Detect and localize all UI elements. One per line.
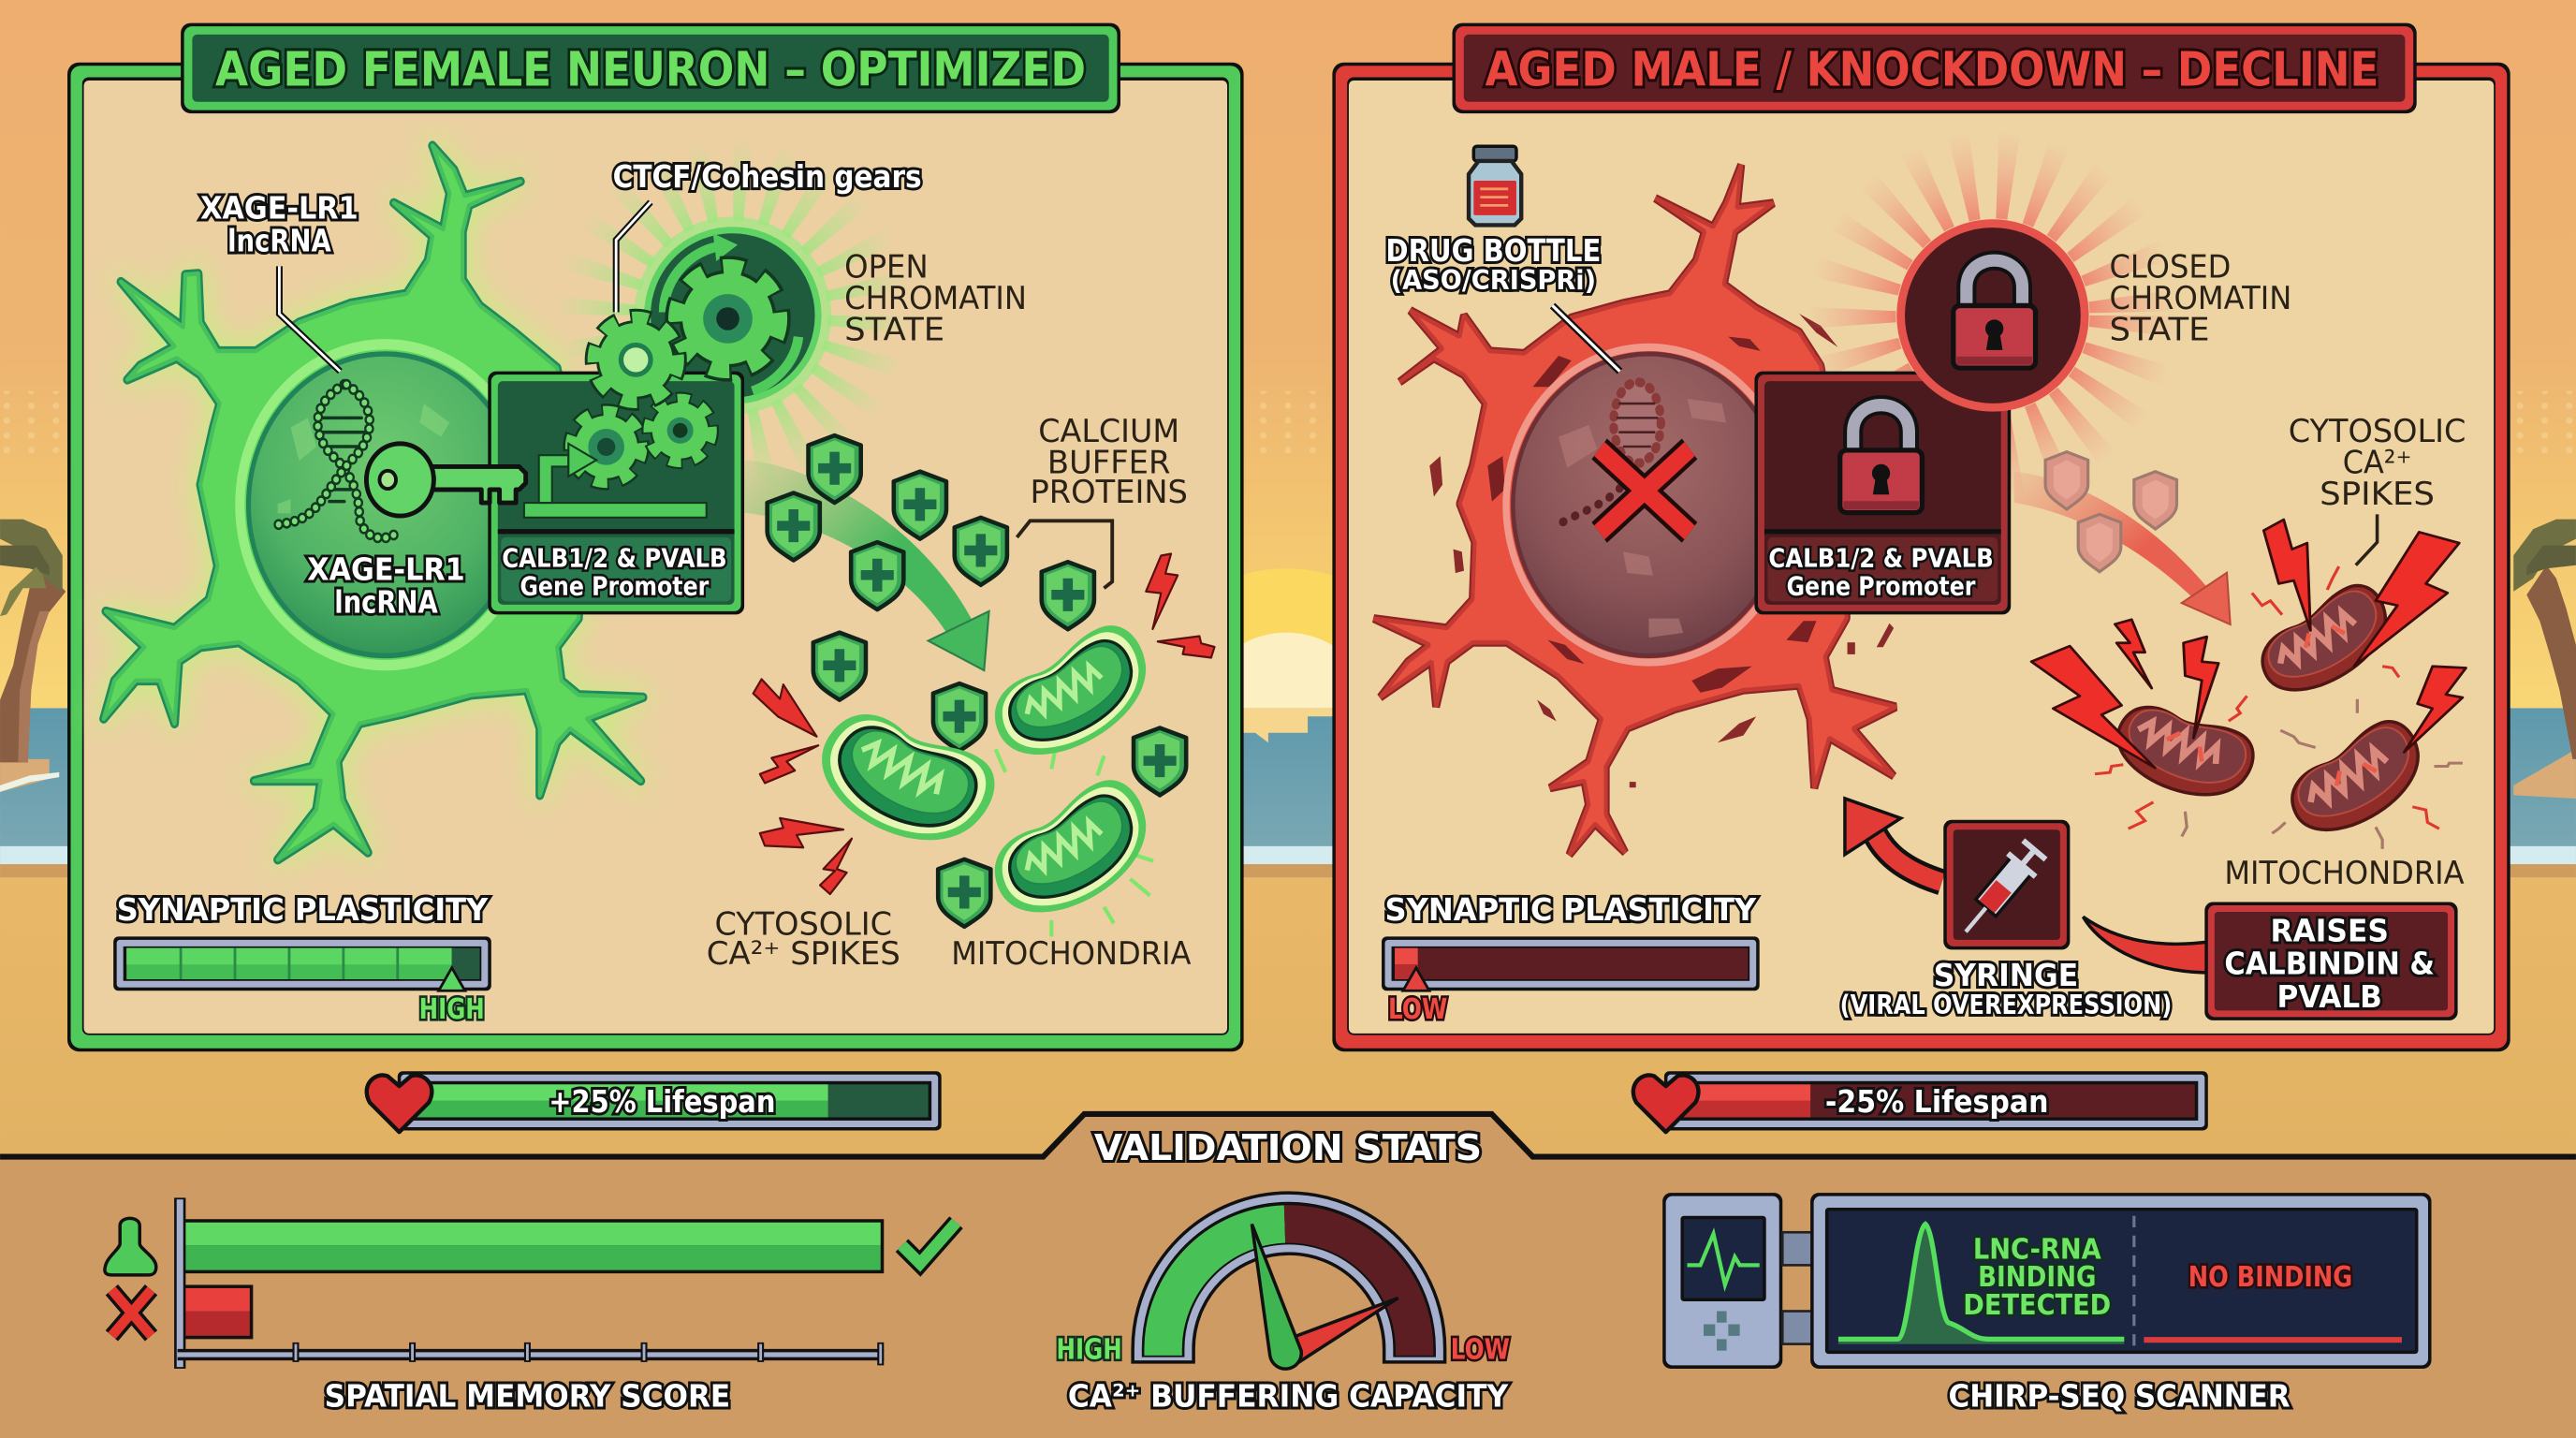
label: cytosolic spikes: CYTOSOLIC (714, 906, 892, 944)
icon: dna helix (273, 385, 394, 538)
label: XAGE-LR1 lncRNA top: XAGE-LR1 (200, 189, 359, 226)
closed chromatin rays (1852, 174, 2134, 457)
connectors (1782, 1232, 1812, 1344)
label: closed chromatin state (2110, 249, 2291, 348)
gauge needle green (1251, 1224, 1301, 1369)
palm tree left (0, 520, 66, 792)
icon: person (105, 1218, 156, 1275)
promoter label: Gene Promoter (1787, 572, 1976, 601)
scanner screen: NO BINDING (2188, 1261, 2352, 1294)
heading: VALIDATION STATS (1094, 1127, 1482, 1169)
callout: raises calbindin: CALBINDIN & (2224, 946, 2435, 982)
icon: faded dna (1563, 382, 1661, 522)
arrow: buffer proteins to mitochondria (744, 460, 989, 670)
scanner screen: LNC-RNA (1973, 1233, 2101, 1266)
icon: lock (1840, 405, 1922, 513)
label: cytosolic spikes: SPIKES (2320, 476, 2435, 513)
chirp-seq scanner (1662, 1193, 2431, 1414)
icon: cohesin gears (593, 267, 780, 403)
label: cytosolic spikes: CA²⁺ (2343, 444, 2411, 481)
banner: male title (1453, 23, 2417, 113)
neuron figure decayed (1374, 165, 1895, 855)
handheld device (1662, 1193, 1782, 1369)
gauge needle red (1275, 1298, 1398, 1367)
label: XAGE-LR1 lncRNA nucleus: lncRNA (334, 584, 438, 621)
promoter gears (570, 399, 712, 483)
icon: drug bottle (1469, 146, 1521, 225)
label: open chromatin state (844, 249, 1027, 348)
sun on horizon (1132, 568, 1441, 877)
neuron cell body and dendrites (104, 146, 643, 859)
scanner screen (1810, 1193, 2431, 1369)
scanner screen: BINDING (1978, 1261, 2096, 1294)
promoter label: CALB1/2 & PVALB (1768, 544, 1994, 573)
neuron cell body and dendrites (1374, 165, 1895, 855)
label: calcium buffer proteins: CALCIUM (1038, 413, 1179, 450)
label: cytosolic spikes: CYTOSOLIC (2289, 413, 2466, 450)
icon: lock (1954, 260, 2036, 368)
label: CTCF/Cohesin gears: CTCF/Cohesin gears (613, 158, 922, 195)
label: closed chromatin state: CHROMATIN (2110, 280, 2291, 317)
label: cytosolic spikes: CA²⁺ SPIKES (707, 935, 900, 973)
promoter label (1768, 544, 1994, 601)
neuron figure (104, 146, 643, 859)
label: open chromatin state: CHROMATIN (844, 280, 1027, 317)
panel: aged male knockdown (1332, 23, 2510, 1051)
label: open chromatin state: OPEN (844, 249, 929, 286)
mitochondria: damaged (2105, 578, 2436, 844)
label: CHIRP-SEQ SCANNER (1949, 1377, 2291, 1414)
calcium spike bolts (2031, 520, 2466, 849)
arrow: syringe to neuron (1845, 799, 1942, 882)
nucleus degraded (1506, 347, 1792, 663)
lifespan bar: plus: +25% Lifespan (549, 1083, 775, 1120)
callout: raises calbindin: PVALB (2277, 978, 2382, 1015)
label: syringe: (VIRAL OVEREXPRESSION) (1840, 990, 2172, 1020)
synaptic plasticity meter low (1382, 891, 1760, 1026)
calcium spike bolts (754, 554, 1214, 894)
label: drug bottle: (ASO/CRISPRi) (1391, 265, 1596, 296)
gauge labels: CA²⁺ BUFFERING CAPACITY (1068, 1377, 1509, 1414)
label: mitochondria: MITOCHONDRIA (2224, 855, 2465, 892)
label: calcium buffer proteins (1017, 413, 1188, 588)
open chromatin sunburst (594, 178, 871, 453)
calcium buffer shields (768, 435, 1186, 927)
label: syringe: SYRINGE (1934, 957, 2078, 993)
synaptic plasticity meter low: SYNAPTIC PLASTICITY (1385, 891, 1757, 928)
synaptic plasticity meter high: HIGH (419, 993, 485, 1026)
label: mitochondria: MITOCHONDRIA (951, 935, 1192, 973)
synaptic plasticity meter low: LOW (1388, 993, 1447, 1026)
bar chart: spatial memory score (105, 1197, 956, 1414)
label: closed chromatin state: STATE (2110, 311, 2210, 348)
lifespan bar: minus: -25% Lifespan (1825, 1083, 2049, 1120)
label: syringe (1840, 957, 2172, 1020)
panel: validation stats (0, 1114, 2576, 1438)
label: calcium buffer proteins: BUFFER (1047, 444, 1171, 481)
label: XAGE-LR1 lncRNA top: lncRNA (227, 223, 331, 259)
icon: x mark (111, 1290, 152, 1336)
promoter label (502, 544, 727, 601)
promoter label: Gene Promoter (520, 572, 710, 601)
gene promoter box locked (1754, 372, 2011, 614)
neuron glow (104, 146, 643, 859)
label: XAGE-LR1 lncRNA nucleus: XAGE-LR1 (307, 551, 465, 588)
gene promoter box (488, 372, 744, 614)
nucleus (240, 345, 531, 666)
label: closed chromatin state: CLOSED (2110, 249, 2231, 286)
label: CTCF/Cohesin gears (613, 158, 922, 312)
banner: female title (181, 23, 1120, 113)
icon: key (366, 444, 526, 516)
label: drug bottle (1385, 232, 1620, 372)
callout: raises calbindin (2083, 902, 2458, 1020)
lifespan bar: plus (367, 1071, 942, 1132)
icon: syringe box (1943, 820, 2070, 949)
label: XAGE-LR1 lncRNA nucleus (307, 551, 465, 621)
closed chromatin circle (1901, 224, 2085, 407)
banner: female title: AGED FEMALE NEURON – OPTIMIZED (215, 42, 1086, 97)
gauge labels: HIGH (1057, 1333, 1122, 1366)
promoter arrow (524, 444, 707, 518)
label: SPATIAL MEMORY SCORE (325, 1377, 730, 1414)
palm tree right (2513, 520, 2576, 799)
gauge labels (1057, 1333, 1510, 1414)
panel: aged female neuron (67, 23, 1244, 1051)
icon: check (902, 1223, 956, 1264)
faded shields (2045, 452, 2176, 572)
banner: male title: AGED MALE / KNOCKDOWN – DECLINE (1486, 42, 2378, 97)
callout: raises calbindin: RAISES (2271, 913, 2389, 949)
arrow: faded buffer to mitochondria (2014, 472, 2231, 624)
label: cytosolic spikes (2289, 413, 2466, 565)
mitochondria: healthy (801, 616, 1167, 936)
signal peak (1838, 1224, 2124, 1344)
label: drug bottle: DRUG BOTTLE (1385, 232, 1601, 269)
promoter label: CALB1/2 & PVALB (502, 544, 727, 573)
synaptic plasticity meter high (113, 891, 491, 1026)
cell debris (1429, 314, 1894, 787)
label: XAGE-LR1 lncRNA top (200, 189, 359, 372)
icon: red x (1600, 449, 1690, 533)
lifespan bar: minus (1633, 1071, 2208, 1132)
label: calcium buffer proteins: PROTEINS (1030, 474, 1188, 511)
gauge labels: LOW (1451, 1333, 1510, 1366)
synaptic plasticity meter high: SYNAPTIC PLASTICITY (117, 891, 489, 928)
scanner screen: DETECTED (1963, 1289, 2111, 1322)
gauge: buffering capacity (1057, 1224, 1510, 1414)
label: open chromatin state: STATE (844, 311, 944, 348)
label: cytosolic spikes (707, 906, 900, 973)
